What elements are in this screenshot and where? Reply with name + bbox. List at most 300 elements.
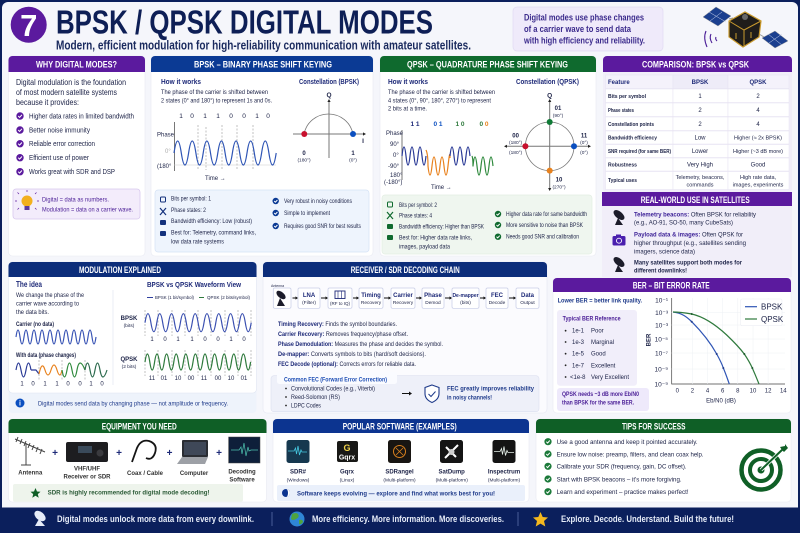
note: QPSK needs more Eb/N0: QPSK needs ~3 dB more Eb/N0 [562,392,640,398]
flow diagram: Output [520,300,535,306]
chart: BPSK phase waveform: Time → [205,176,226,182]
info box: BPSK properties: Requires good SNR for best results [284,224,361,230]
comparison grid: 4 [756,122,760,128]
note: SDR recommended [13,484,243,502]
chart: BPSK phase waveform: Phase [157,132,175,138]
chart: BER curves: Eb/N0 (dB) [706,399,736,405]
comparison grid: Typical uses [608,178,637,184]
chart: QPSK phase waveform: -90° [388,164,400,170]
checklist of benefits: Higher data rates in limited bandwidth [29,113,134,120]
chart: QPSK constellation: 00 [512,134,520,140]
callout: digital modes summary [513,7,663,51]
chart: BER curves: 8 [736,388,740,394]
chart: BER curves: 10⁻³ [655,310,669,317]
stage definitions: FEC Decode (optional): Corrects errors for reliable data. [278,362,416,368]
panel header: QPSK [380,56,596,72]
chart: carrier with data: 0 [100,382,104,388]
chart: BPSK constellation [293,79,366,164]
info box: BPSK properties: Simple to implement [284,211,330,217]
info box: QPSK properties: Best for: Higher data rate links, [399,236,472,242]
item: Inspectrum [488,440,521,483]
how it works text: How it works [388,79,428,86]
note: SDR recommended: SDR is highly recommended for digital mode decoding! [48,490,210,497]
comparison grid: commands [687,182,714,188]
chart: QPSK phase waveform: 0° [393,153,399,159]
chart: BPSK constellation: 1 [351,151,355,157]
flow diagram: (Filter) [302,300,316,306]
chart: BPSK phase waveform: 0° [165,149,171,155]
item: Gqrx: Gqrx [339,454,355,462]
chart: QPSK constellation: (180°) [509,150,523,156]
flow diagram: De-mapper [452,293,479,299]
comparison grid: Bits per symbol [608,94,646,100]
icon: target with arrow [742,444,788,490]
how it works text: 2 bits at a time. [388,106,427,112]
info box: QPSK properties: Needs good SNR and calibration [506,235,579,241]
badge: number 7 [11,7,47,43]
flow diagram: Decode [489,300,506,306]
text: telemetry beacons [634,211,757,226]
text: telemetry beacons: Telemetry beacons: Often BPSK for reliability [634,211,757,218]
chart: waveform view: 10 [228,376,235,382]
note: QPSK needs more Eb/N0 [557,388,649,411]
panel: popular software [273,419,529,502]
info box: QPSK properties: More sensitive to noise than BPSK [506,223,583,229]
chart: QPSK constellation: (90°) [553,113,564,119]
panel header: real-world use [602,192,792,206]
panel: QPSK [380,56,596,256]
chart: carrier with data: With data (phase changes) [16,353,76,359]
subtitle: Modern, efficient modulation for high-reliability communication with amateur satellites. [56,38,471,52]
chart: QPSK constellation: 01 [555,106,562,112]
item: receiver: VHF/UHF [74,467,100,473]
panel header: software: POPULAR SOFTWARE (EXAMPLES) [343,422,457,432]
comparison grid: 1 [698,94,702,100]
chart: waveform view: 1 [190,337,194,343]
comparison grid: BPSK [692,80,709,86]
icon: star [533,512,548,526]
chart: BER curves: 4 [706,388,710,394]
chart: BPSK constellation: I [362,138,364,145]
icon: camera [612,234,626,246]
comparison grid: Bandwidth efficiency [608,136,658,142]
chart: carrier with data [16,353,107,388]
item: decoding software: Software [229,478,255,484]
chart: waveform view: BPSK (1 bit/symbol) [155,295,194,300]
flow diagram [271,284,539,308]
item: SatDump: (Multi-platform) [436,477,468,483]
note: phase not amplitude: Digital modes send data by changing phase — not amplitude or frequency. [38,400,228,408]
chart: BER curves: 10 [750,388,757,394]
icon: footer dish [32,509,48,526]
the idea text: carrier wave according to [16,302,80,308]
chart: waveform view: 1 [150,337,154,343]
info box: BPSK properties: low data rate systems [171,240,224,246]
stage definitions: Timing Recovery: Finds the symbol boundaries. [278,322,397,328]
item: receiver [63,442,111,481]
box: typical BER reference: 1e-3 [572,340,585,346]
intro text: of most modern satellite systems [16,88,117,97]
info box: BPSK properties: Phase states: 2 [171,208,207,214]
panel header: BER: BER – BIT ERROR RATE [633,281,710,292]
how it works text: The phase of the carrier is shifted between [161,90,268,96]
item: receiver: Receiver or SDR [63,475,111,481]
text: lower BER: Lower BER = better link quality. [558,298,642,305]
comparison grid: Constellation points [608,122,654,128]
comparison grid: images, experiments [733,182,784,188]
chart: QPSK phase waveform: (-180°) [384,180,402,186]
item: SDR#: SDR# [290,470,307,476]
panel header: receiver [263,262,547,277]
box: typical BER reference: 1e-1 [572,329,585,335]
chart: BPSK constellation: 0 [302,151,306,157]
flow diagram: Recovery [361,300,382,306]
item: SDRangel [383,440,416,483]
footer text: efficiency: More efficiency. More information. More discoveries. [312,514,504,524]
chart: BPSK phase waveform: (180° [157,164,172,170]
box: typical BER reference: <1e-8 [570,375,586,381]
item: SatDump: SatDump [439,470,465,476]
info box: BPSK properties: Bandwidth efficiency: Low (robust) [171,219,252,225]
text: many satellites: different downlinks! [634,267,687,274]
plus signs [52,448,222,459]
item: cable: Coax / Cable [127,471,164,477]
how it works text: How it works [161,79,201,86]
item: computer [177,440,209,477]
chart legend [741,299,784,326]
item: Inspectrum: Inspectrum [488,470,520,476]
chart: waveform view: 1 [229,337,233,343]
panel header: tips [536,419,791,433]
chart: BER curves: 10⁻⁹ [655,382,668,388]
box: typical BER reference: 1e-5 [572,352,585,358]
chart: QPSK constellation: 10 [556,178,563,184]
box: common FEC: FEC greatly improves reliability [447,387,535,393]
chart: QPSK phase waveform: Phase [386,131,404,137]
chart: waveform view: QPSK [120,357,138,363]
info box: QPSK properties: images, payload data [399,245,451,251]
box: typical BER reference: 1e-7 [572,363,585,369]
flow diagram: Phase [424,293,442,299]
panel header: equipment [8,419,266,433]
plus signs: + [167,448,173,459]
item: SDRangel: SDRangel [385,470,414,476]
panel: bit error rate [553,278,791,413]
panel: BPSK [151,56,373,256]
box: typical BER reference: Very Excellent [591,375,629,381]
chart: QPSK phase waveform: Time → [431,185,452,191]
chart: carrier with data: 1 [55,382,59,388]
chart: BPSK phase waveform: 0 [229,113,233,120]
chart: BPSK constellation: (180°) [297,158,311,164]
box: typical BER reference: Typical BER Reference [563,316,621,322]
chart: QPSK phase waveform: 90° [390,142,400,148]
callout: digital equals numbers [13,189,140,219]
comparison grid: Higher (~3 dB more) [733,149,783,155]
chart: waveform view: 11 [201,376,208,382]
chart: QPSK phase waveform [384,121,493,191]
chart: BER curves: BER [646,333,652,346]
panel header: modulation explained [8,262,256,277]
chart legend: QPSK [761,315,784,324]
flow diagram: Antenna [271,284,284,288]
info box: QPSK properties: Bits per symbol: 2 [399,203,438,209]
chart: waveform view: 01 [161,376,168,382]
chart: BER curves: 10⁻³ [655,322,669,330]
title: BPSK / QPSK DIGITAL MODES [56,4,433,40]
comparison grid: Telemetry, beacons, [676,175,725,181]
chart: waveform view: QPSK (2 bits/symbol) [207,295,250,300]
tips checklist [544,438,704,496]
panel header: modulation explained: MODULATION EXPLAINED [79,265,161,276]
intro text: Digital modulation is the foundation [16,78,126,87]
chart: QPSK constellation: 11 [581,134,588,140]
comparison grid: Low [694,136,706,142]
tips checklist: Ensure low noise: preamp, filters, and clean coax help. [557,451,704,458]
chart: carrier with data: 0 [31,382,35,388]
text: payload data: Payload data & images: Often QPSK for [634,232,744,239]
chart: carrier no data [16,322,96,344]
chart: carrier with data: 1 [89,382,93,388]
item: SDR#: (Windows) [287,477,310,483]
box: typical BER reference: Poor [591,329,604,335]
note: software keeps evolving: Software keeps evolving — explore and find what works best for you! [297,491,495,498]
text: payload data [634,232,746,255]
item: Gqrx: (Linux) [340,477,355,483]
item: antenna: Antenna [18,471,43,477]
icon: dish both modes [612,255,626,272]
flow diagram: Timing [361,293,381,299]
comparison grid: High rate data, [740,175,777,181]
icon: satellite [703,7,788,48]
chart: carrier with data: 0 [66,382,70,388]
flow diagram: Demod [425,300,441,306]
text: payload data: imagers, science data) [634,248,695,255]
chart: waveform view: 11 [149,376,156,382]
flow diagram: LNA [303,293,316,299]
tips checklist: Use a good antenna and keep it pointed accurately. [557,439,698,446]
panel header: equipment: EQUIPMENT YOU NEED [102,422,177,432]
panel: modulation explained [8,262,256,413]
info box: BPSK properties: Best for: Telemetry, command links, [171,230,256,236]
chart: QPSK constellation: (0°) [580,150,588,156]
chart: waveform view: 0 [242,337,246,343]
chart: BER curves: 10⁻⁵ [655,336,668,344]
chart: carrier with data: 0 [78,382,82,388]
comparison grid: QPSK [749,80,767,86]
plus signs: + [52,448,58,459]
chart: BPSK phase waveform: 1 [203,113,207,120]
chart: QPSK phase waveform: 1 0 [455,121,465,128]
footer text: downlink: Digital modes unlock more data from every downlink. [57,514,254,524]
chart: waveform view: 10 [175,376,182,382]
comparison grid: Higher (≈ 2x BPSK) [734,136,782,142]
chart: waveform view: 0 [216,337,220,343]
chart: QPSK constellation: (0°) [580,140,588,146]
chart: QPSK phase waveform: 1 1 [410,121,420,128]
chart: BPSK phase waveform: 0 [266,113,270,120]
chart legend: BPSK [761,302,783,312]
panel header: BPSK: BPSK – BINARY PHASE SHIFT KEYING [194,60,332,70]
chart: QPSK constellation: (180°) [509,140,523,146]
info box: QPSK properties [382,195,592,254]
box: common FEC: Convolutional Codes (e.g., Viterbi) [291,386,375,392]
callout: digital modes summary: of a carrier wave to send data [524,24,632,34]
info box: BPSK properties: Bits per symbol: 1 [171,196,212,202]
icon: globe [290,512,304,526]
panel: tips for success [536,419,791,502]
panel: comparison table [603,56,792,193]
comparison grid [606,75,789,190]
chart: QPSK phase waveform: 0 0 [479,121,489,128]
item: SDRangel: (Multi-platform) [383,477,416,483]
comparison grid: 2 [698,122,702,128]
box: common FEC: Common FEC (Forward Error Correction) [284,377,387,383]
checklist of benefits: Reliable error correction [29,141,95,148]
chart: carrier with data: 1 [43,382,47,388]
item: Inspectrum: (Multi-platform) [488,477,521,483]
note: software keeps evolving [277,485,525,501]
chart: BER curves: 12 [765,388,772,394]
footer banner [0,508,800,533]
chart: BER curves: 10⁻⁷ [655,350,669,358]
comparison grid: SNR required (for same BER) [608,149,671,155]
panel header: why digital modes [8,56,145,72]
chart: waveform view: BPSK [121,316,138,322]
intro text: because it provides: [16,98,79,107]
how it works text: The phase of the carrier is shifted between [388,90,495,96]
chart: BPSK phase waveform [157,113,276,182]
tips checklist: Start with BPSK beacons – it's more forgiving. [557,476,682,483]
chart: waveform view: 00 [215,376,222,382]
flow diagram: Carrier [393,293,414,299]
comparison grid: 2 [698,108,702,114]
callout: digital equals numbers: Modulation = data on a carrier wave. [42,206,133,214]
info box: QPSK properties: Bandwidth efficiency: Higher than BPSK [399,225,484,231]
the idea text: the data bits. [16,310,49,316]
how it works text: 4 states (0°, 90°, 180°, 270°) to represent [388,98,491,104]
comparison grid: Feature [608,80,630,86]
plus signs: + [216,448,222,459]
info box: QPSK properties: Higher data rate for same bandwidth [506,212,587,218]
tips checklist: Calibrate your SDR (frequency, gain, DC offset). [557,464,687,471]
comparison grid: Good [751,162,765,168]
chart: BER curves: 10⁻¹ [655,298,669,304]
the idea text: We change the phase of the [16,293,85,299]
chart: waveform view: (bits) [124,323,135,329]
chart: QPSK phase waveform: 180° [390,173,403,179]
box: typical BER reference: Good [591,352,606,358]
panel header: why digital modes: WHY DIGITAL MODES? [36,60,117,70]
chart: BPSK constellation: (0°) [349,158,357,164]
panel: real-world use in satellites [602,192,792,277]
chart: carrier with data: 1 [20,382,24,388]
info box: BPSK properties: Very robust in noisy conditions [284,199,352,205]
chart: BER curves: 0 [676,388,680,394]
comparison grid: Very High [687,162,713,168]
comparison grid: 4 [756,108,760,114]
how it works text [161,79,272,104]
text: many satellites [634,259,742,274]
chart: QPSK constellation [504,79,591,191]
checklist of benefits [16,112,134,176]
chart: BER curves: 14 [780,388,787,394]
note: phase not amplitude [16,398,228,408]
chart: waveform view: 01 [241,376,248,382]
text: payload data: higher throughput (e.g., satellites sending [634,240,746,247]
panel header: comparison [603,56,792,72]
checklist of benefits: Efficient use of power [29,155,90,162]
chart: BPSK phase waveform: 1 [216,113,220,120]
the idea text [16,280,85,316]
chart: waveform view: (2 bits) [122,364,137,370]
panel header: tips: TIPS FOR SUCCESS [622,422,686,432]
callout: digital modes summary: with high efficiency and reliability. [523,36,645,46]
panel header: comparison: COMPARISON: BPSK vs QPSK [642,60,749,70]
chart: carrier no data: Carrier (no data) [16,322,54,328]
chart: BPSK constellation: Constellation (BPSK) [299,79,359,86]
comparison grid: Phase states [608,108,634,114]
panel header: QPSK: QPSK – QUADRATURE PHASE SHIFT KEYING [407,60,568,70]
box: common FEC: Reed-Solomon (RS) [291,395,340,401]
chart: waveform view [120,282,251,382]
info box: QPSK properties: Phase states: 4 [399,214,433,220]
how it works text [388,79,495,112]
chart: BPSK phase waveform: 1 [255,113,259,120]
callout: digital equals numbers: Digital = data as numbers. [42,196,109,204]
tips checklist: Learn and experiment – practice makes perfect! [557,489,689,496]
chart: BER curves: 10⁻⁹ [655,366,668,374]
chart: BPSK phase waveform: 0 [242,113,246,120]
chart: QPSK constellation: (270°) [552,184,566,190]
comparison grid: 2 [756,94,760,100]
box: typical BER reference: Marginal [591,340,614,346]
chart: waveform view: 1 [176,337,180,343]
chart: waveform view: BPSK vs QPSK Waveform View [147,282,241,289]
panel header: real-world use: REAL-WORLD USE IN SATELLITES [641,195,750,206]
stage definitions [278,322,443,368]
box: common FEC [271,372,539,412]
box: typical BER reference: Excellent [591,363,616,369]
stage definitions: Carrier Recovery: Removes frequency/phase offset. [278,332,408,338]
stage definitions: Phase Demodulation: Measures the phase and decides the symbol. [278,342,443,348]
item: SDR# [286,440,310,483]
how it works text: 2 states (0° and 180°) to represent 1s and 0s. [161,98,272,104]
chart: BPSK phase waveform: 0 [190,113,194,120]
box: common FEC: in noisy channels! [447,396,492,402]
comparison grid: Lower [692,149,708,155]
chart: QPSK constellation: Q [547,92,552,100]
chart: QPSK phase waveform: 0 1 [433,121,443,128]
chart: waveform view: 0 [163,337,167,343]
chart: QPSK constellation: Constellation (QPSK) [516,79,579,86]
flow diagram: FEC [491,293,504,299]
text: telemetry beacons: (e.g., AO-91, SO-50, many CubeSats) [634,219,733,226]
panel header: BPSK [151,56,373,72]
item: antenna [15,437,45,477]
checklist of benefits: Works great with SDR and DSP [29,169,115,176]
badge: number 7: 7 [20,8,37,43]
panel: receiver decoding chain [263,262,547,413]
flow diagram: (bits) [460,300,471,306]
item: SatDump [436,440,468,483]
box: typical BER reference [557,310,637,386]
text: many satellites: Many satellites support both modes for [634,259,742,266]
chart: waveform view: 0 [203,337,207,343]
panel: why digital modes [8,56,145,256]
chart: BER curves: 6 [721,388,725,394]
item: Gqrx: Gqrx [340,470,355,476]
